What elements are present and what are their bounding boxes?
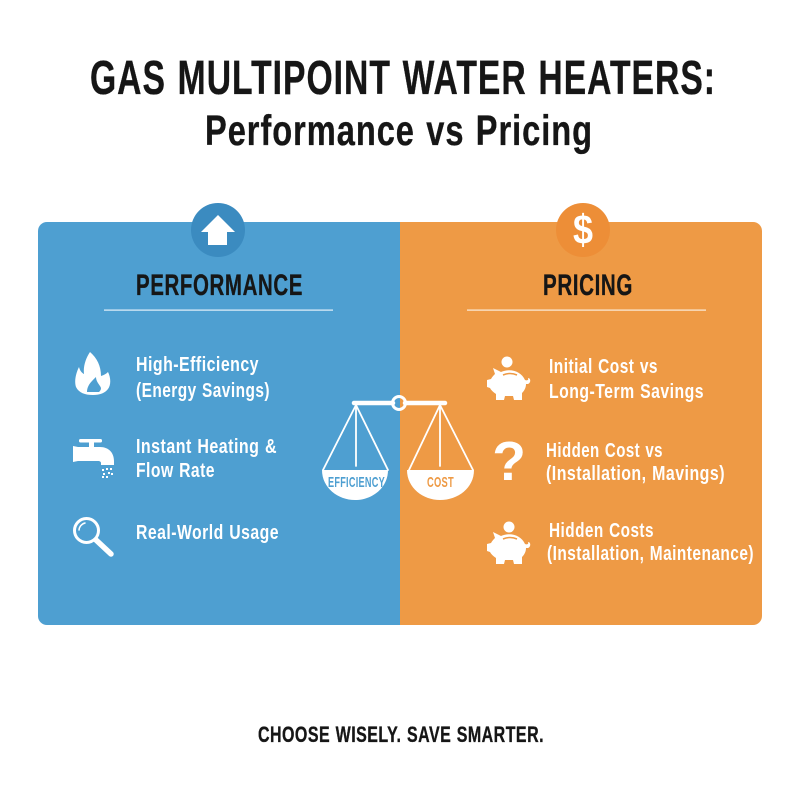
text: initial cost: Long-Term Savings bbox=[549, 381, 704, 403]
text: high-efficiency: (Energy Savings) bbox=[136, 380, 270, 402]
text: hidden costs bbox=[547, 520, 754, 565]
icon: balance scale bbox=[322, 396, 474, 500]
icon: dollar badge: $ bbox=[573, 206, 593, 253]
text: initial cost: Initial Cost vs bbox=[549, 356, 658, 378]
heading: pricing: PRICING bbox=[543, 269, 633, 302]
text: instant heating bbox=[136, 436, 277, 482]
text: instant heating: Flow Rate bbox=[136, 460, 215, 482]
panel: pricing bbox=[400, 203, 762, 625]
text: hidden cost bbox=[546, 440, 725, 485]
text: high-efficiency: High-Efficiency bbox=[136, 354, 259, 376]
icon: dollar badge bbox=[556, 203, 610, 257]
text: initial cost bbox=[549, 356, 704, 403]
panel: performance bbox=[38, 203, 400, 625]
icon: piggy bank bbox=[487, 522, 530, 564]
left pan: efficiency bbox=[322, 470, 388, 500]
icon: magnifier bbox=[74, 518, 111, 554]
text: high-efficiency bbox=[136, 354, 270, 402]
right pan: cost: COST bbox=[427, 474, 454, 491]
text: instant heating: Instant Heating & bbox=[136, 436, 277, 458]
icon: faucet bbox=[73, 439, 114, 478]
icon: question mark: ? bbox=[492, 430, 526, 492]
text: hidden costs: Hidden Costs bbox=[549, 520, 654, 542]
heading: performance: PERFORMANCE bbox=[136, 269, 303, 302]
icon: blue house arrow badge bbox=[191, 203, 245, 257]
icon: piggy bank bbox=[487, 356, 530, 400]
title: Performance vs Pricing bbox=[205, 107, 593, 155]
text: real-world usage: Real-World Usage bbox=[136, 522, 279, 544]
title bbox=[90, 52, 716, 155]
text: hidden cost: (Installation, Mavings) bbox=[546, 463, 725, 485]
left pan: efficiency: EFFICIENCY bbox=[328, 474, 385, 491]
icon: flame bbox=[75, 352, 110, 395]
tagline: CHOOSE WISELY. SAVE SMARTER. bbox=[258, 722, 544, 747]
text: hidden cost: Hidden Cost vs bbox=[546, 440, 663, 462]
right pan: cost bbox=[407, 470, 474, 500]
